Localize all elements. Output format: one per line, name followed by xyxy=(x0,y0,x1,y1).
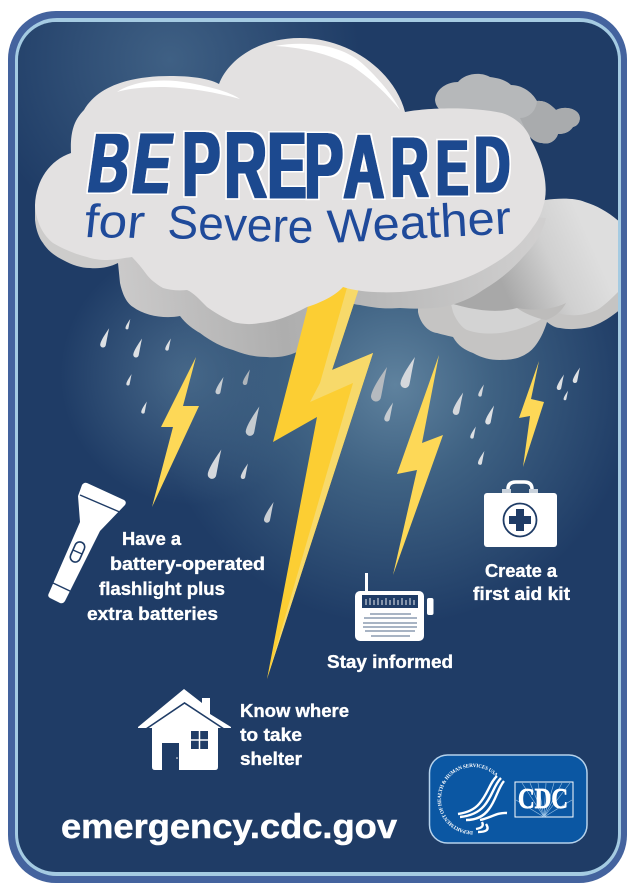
small grey cloud, upper right xyxy=(435,74,580,144)
icon: first aid kit xyxy=(484,482,557,547)
cdc wordmark box: CDC xyxy=(518,783,568,815)
hhs seal ring text: DEPARTMENT OF HEALTH & HUMAN SERVICES USA xyxy=(438,764,498,834)
house label: shelter xyxy=(240,748,302,769)
website address: emergency.cdc.gov xyxy=(61,808,397,846)
flashlight label xyxy=(87,528,265,624)
main cloud side bands xyxy=(35,200,546,357)
rain drops xyxy=(100,319,580,523)
title: be prepared xyxy=(83,111,510,218)
first aid kit label xyxy=(473,560,570,604)
title: be prepared: R xyxy=(224,111,267,218)
title: be prepared: E xyxy=(267,111,306,218)
title: be prepared: E xyxy=(436,124,469,212)
main cloud top face xyxy=(35,38,546,324)
flashlight label: battery-operated xyxy=(110,553,265,574)
title: be prepared: R xyxy=(391,120,429,215)
main lightning bolt xyxy=(267,270,373,679)
cdc logo badge xyxy=(428,754,588,844)
icon: house xyxy=(138,689,231,770)
flashlight label: flashlight plus xyxy=(99,578,225,599)
flashlight label: extra batteries xyxy=(87,603,218,624)
lightning bolt, centre right xyxy=(393,355,443,575)
title: be prepared: A xyxy=(343,116,384,218)
crease xyxy=(517,303,566,320)
first aid kit label: Create a xyxy=(485,560,558,581)
subtitle: for severe weather: for xyxy=(82,194,147,248)
title: be prepared: E xyxy=(127,116,178,212)
title: be prepared: P xyxy=(182,114,220,216)
house label: Know where xyxy=(240,700,349,721)
cloud highlight, left lobe xyxy=(117,80,240,99)
cloud left side band xyxy=(35,200,140,268)
cloud lower side band xyxy=(118,200,546,357)
subtitle: for severe weather: Weather xyxy=(326,190,512,253)
house label xyxy=(240,700,349,769)
icon: flashlight xyxy=(48,483,126,603)
icon: radio xyxy=(355,573,434,641)
cloud highlight, top lobe xyxy=(275,44,400,110)
lower lobes xyxy=(418,292,618,360)
small lightning bolt, right xyxy=(519,361,544,467)
title: be prepared: D xyxy=(474,121,510,210)
small lightning bolt, left xyxy=(152,357,199,507)
flashlight label: Have a xyxy=(122,528,182,549)
top face xyxy=(440,199,622,315)
middle lobe xyxy=(452,304,540,334)
hhs eagle xyxy=(458,776,507,832)
radio label: Stay informed xyxy=(327,651,453,672)
right background cloud xyxy=(418,199,622,360)
title: be prepared: B xyxy=(83,117,136,211)
first aid kit label: first aid kit xyxy=(473,583,570,604)
house label: to take xyxy=(240,724,302,745)
title: be prepared: P xyxy=(304,113,343,218)
bolt highlight xyxy=(267,270,373,679)
subtitle: for severe weather: Severe xyxy=(167,195,314,253)
subtitle: for severe weather xyxy=(82,190,512,253)
